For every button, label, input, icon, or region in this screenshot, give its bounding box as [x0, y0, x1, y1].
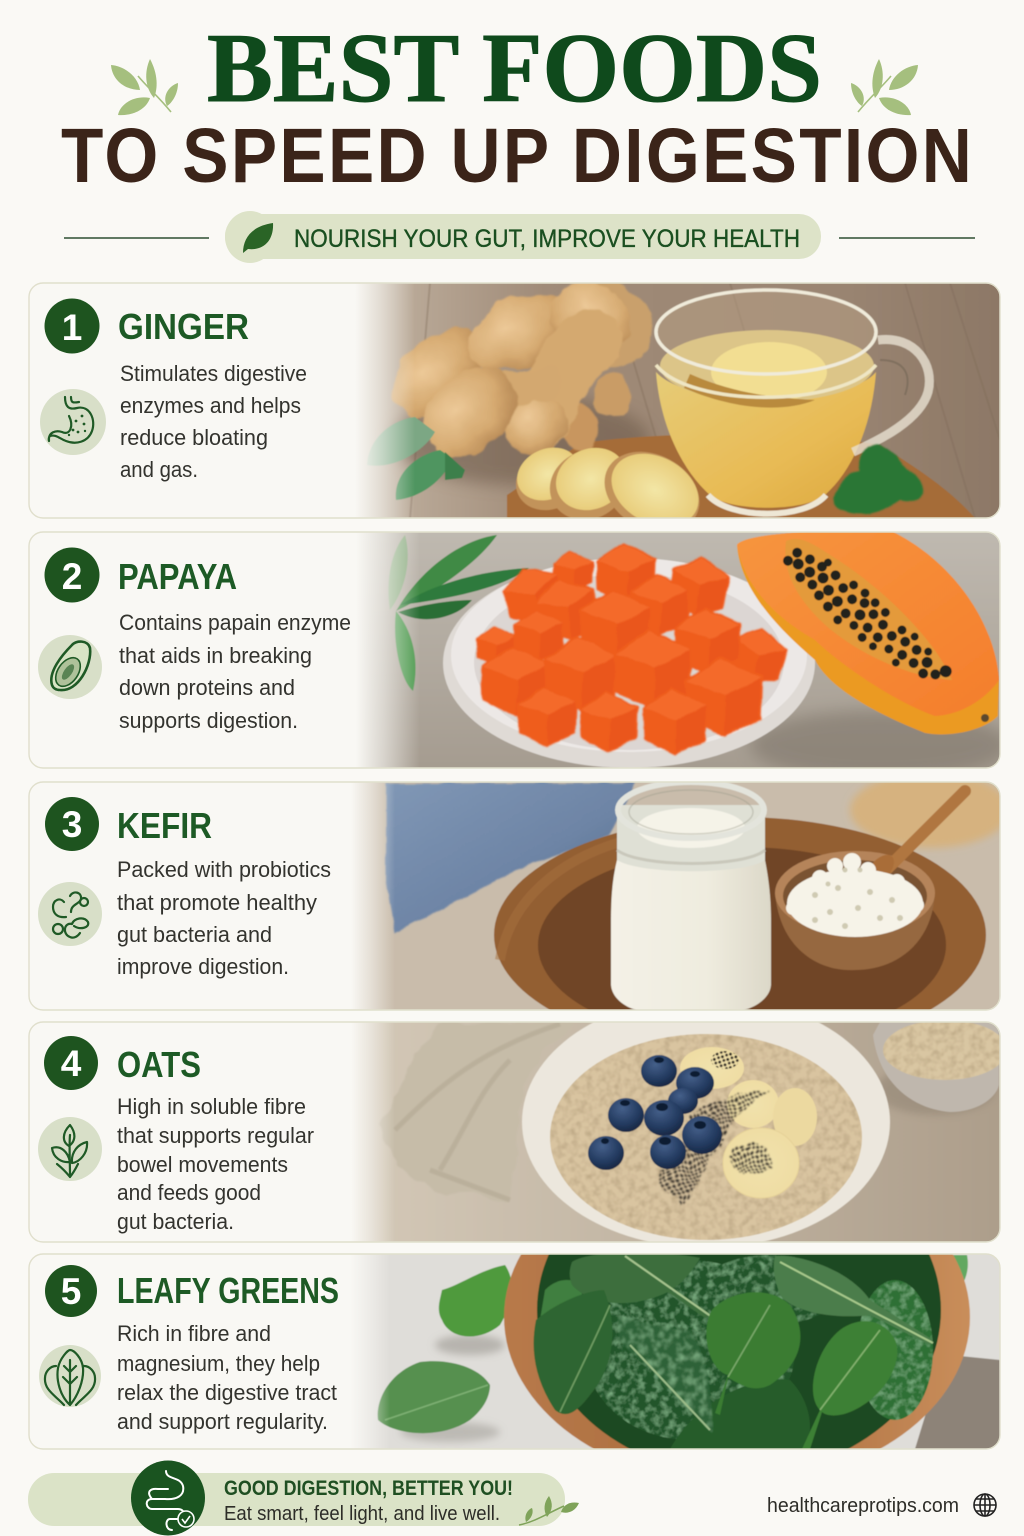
- text: papaya description: down proteins and: [119, 675, 295, 700]
- icon: intestines badge: [131, 1460, 205, 1536]
- text: papaya description: supports digestion.: [119, 708, 298, 733]
- icon: papaya: [38, 635, 102, 699]
- text: leafy greens description: and support regularity.: [117, 1409, 328, 1434]
- heading: papaya: PAPAYA: [118, 556, 237, 597]
- title line two: TO SPEED UP DIGESTION: [61, 113, 972, 199]
- icon: left leaf sprig: [111, 59, 178, 115]
- icon: greens: [39, 1345, 101, 1407]
- title: [61, 14, 972, 199]
- number badge 2: [44, 548, 100, 602]
- number badge 4: 4: [61, 1043, 82, 1084]
- text: kefir description: Packed with probiotics: [117, 857, 331, 882]
- number badge 3: [45, 797, 99, 851]
- title line one: BEST FOODS: [207, 14, 822, 123]
- text: leafy greens description: magnesium, they help: [117, 1351, 320, 1376]
- text: leafy greens description: [117, 1321, 337, 1434]
- text: kefir description: [117, 857, 331, 979]
- panel: ginger: [28, 282, 1001, 519]
- text: oats description: gut bacteria.: [117, 1209, 234, 1234]
- photo: papaya bowl: [362, 532, 1000, 768]
- icon: right leaf sprig: [851, 59, 918, 115]
- footer heading: GOOD DIGESTION, BETTER YOU!: [224, 1477, 513, 1500]
- number badge 2: 2: [62, 556, 82, 597]
- icon: footer sprig: [519, 1496, 579, 1525]
- heading: leafy greens: LEAFY GREENS: [117, 1270, 339, 1311]
- text: oats description: [117, 1094, 314, 1234]
- number badge 5: 5: [61, 1271, 81, 1312]
- text: papaya description: [119, 610, 351, 733]
- icon: plant: [38, 1117, 102, 1181]
- icon: leaf: [243, 223, 273, 253]
- photo: oatmeal bowl: [358, 1022, 1000, 1242]
- text: leafy greens description: relax the digestive tract: [117, 1380, 337, 1405]
- text: oats description: High in soluble fibre: [117, 1094, 306, 1119]
- panel: papaya: [29, 530, 1010, 780]
- number badge 3: 3: [62, 804, 82, 845]
- text: ginger description: reduce bloating: [120, 425, 268, 450]
- footer banner: [28, 1460, 579, 1536]
- photo: ginger tea: [362, 284, 1000, 518]
- icon: globe: [974, 1494, 996, 1516]
- text: papaya description: that aids in breaking: [119, 643, 312, 668]
- text: kefir description: that promote healthy: [117, 890, 317, 915]
- text: kefir description: improve digestion.: [117, 954, 289, 979]
- text: ginger description: [120, 361, 307, 482]
- photo: kefir jar: [356, 782, 1000, 1010]
- footer tagline: Eat smart, feel light, and live well.: [224, 1503, 500, 1525]
- text: leafy greens description: Rich in fibre and: [117, 1321, 271, 1346]
- number badge 5: [45, 1265, 97, 1317]
- text: papaya description: Contains papain enzyme: [119, 610, 351, 635]
- heading: kefir: KEFIR: [117, 805, 212, 846]
- subtitle text: NOURISH YOUR GUT, IMPROVE YOUR HEALTH: [294, 225, 800, 253]
- text: oats description: and feeds good: [117, 1180, 261, 1205]
- panel: kefir: [28, 781, 1001, 1011]
- website: healthcareprotips.com: [767, 1495, 959, 1517]
- text: ginger description: and gas.: [120, 457, 198, 482]
- photo: bowl of greens: [363, 1254, 1000, 1448]
- icon: probiotics: [38, 882, 102, 946]
- heading: ginger: GINGER: [118, 306, 249, 347]
- number badge 1: [44, 298, 100, 354]
- text: kefir description: gut bacteria and: [117, 922, 272, 947]
- text: ginger description: Stimulates digestive: [120, 361, 307, 386]
- heading: oats: OATS: [117, 1044, 201, 1085]
- subtitle banner: [64, 211, 975, 263]
- number badge 4: [44, 1036, 98, 1090]
- number badge 1: 1: [62, 307, 82, 348]
- text: oats description: that supports regular: [117, 1123, 314, 1148]
- panel: oats: [28, 1021, 1001, 1243]
- icon: stomach: [40, 389, 106, 455]
- text: ginger description: enzymes and helps: [120, 393, 301, 418]
- panel: leafy greens: [28, 1253, 1001, 1450]
- text: oats description: bowel movements: [117, 1152, 288, 1177]
